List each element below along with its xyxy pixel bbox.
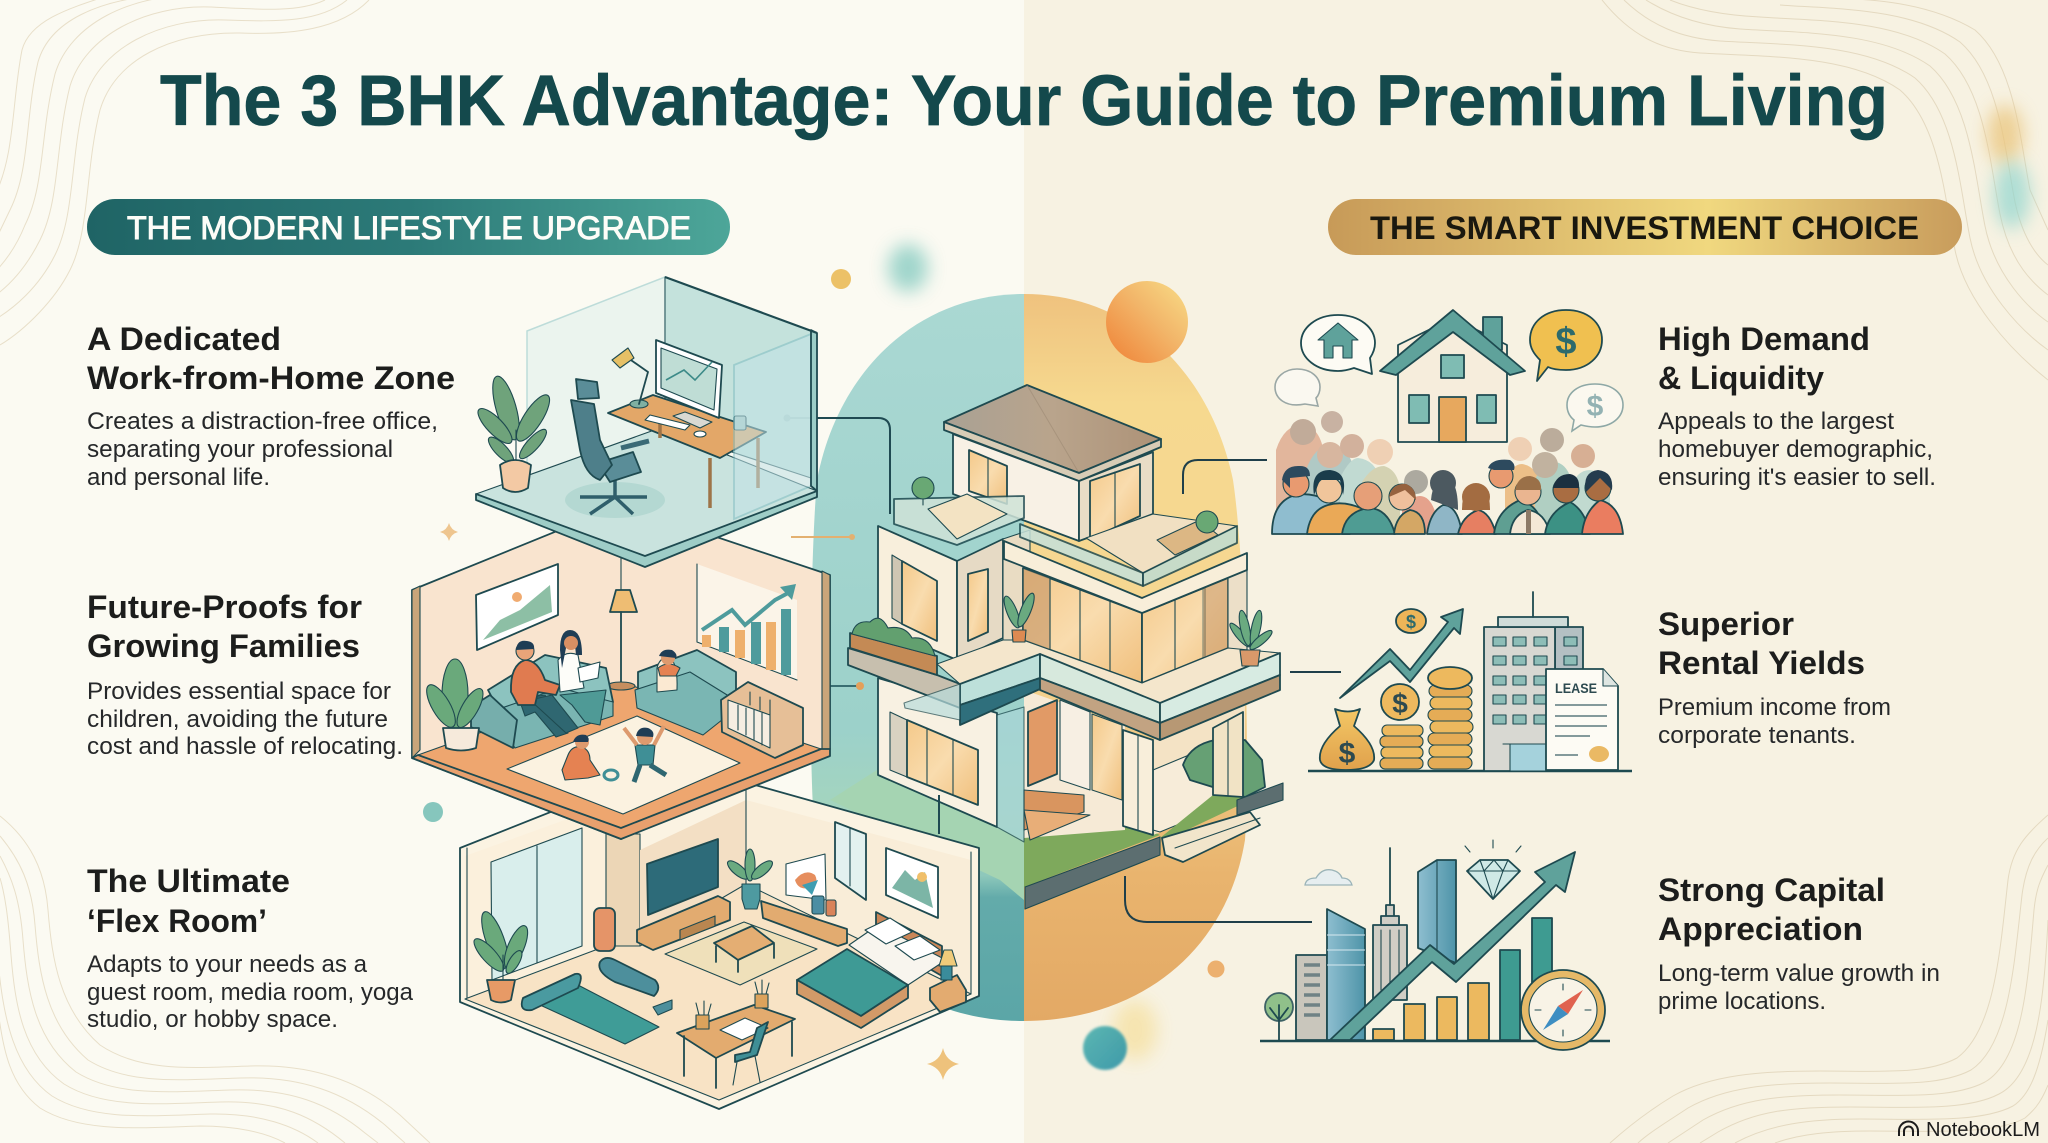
flex room: shelf, art and plant: [725, 822, 866, 946]
icon: floating coin: $: [1406, 612, 1416, 632]
office: floor slab: [476, 428, 817, 567]
left section banner: THE MODERN LIFESTYLE UPGRADE: [127, 210, 691, 246]
family room: walls and slab: [412, 505, 830, 839]
text block: demand and liquidity: Appeals to the largest: [1658, 408, 1894, 435]
icon group: rental yields: [1308, 592, 1632, 771]
house: ground floor right wing: [1024, 690, 1283, 862]
icon: gold dollar bubble: $: [1555, 321, 1577, 363]
icon: diamond: [1465, 840, 1521, 899]
house: lawn and base: [830, 768, 1160, 909]
text block: work-from-home zone: Creates a distraction-free office,: [87, 408, 438, 435]
connector lines: [784, 414, 1341, 922]
family room: second sofa with child: [635, 650, 736, 735]
office: front glass panel: [665, 277, 817, 519]
right section banner: THE SMART INVESTMENT CHOICE: [1370, 210, 1919, 246]
text block: work-from-home zone: and personal life.: [87, 464, 270, 491]
flex room: wall picture: [886, 848, 938, 918]
icon: office building: [1484, 592, 1583, 771]
icon: floating coin: [1396, 609, 1426, 633]
text block: rental yields: [1658, 606, 1891, 749]
flex room: walls and floor: [460, 783, 979, 1109]
text block: flex room: ‘Flex Room’: [87, 903, 267, 939]
text block: capital appreciation: Appreciation: [1658, 911, 1863, 947]
text block: growing families: Future-Proofs for: [87, 589, 362, 625]
icon: lease document: LEASE: [1555, 680, 1597, 696]
icon: speech bubble with house: [1301, 315, 1375, 374]
flex room: desk and chair: [677, 980, 795, 1088]
text block: growing families: Provides essential space for: [87, 678, 391, 705]
illustration: home office room: [473, 277, 817, 567]
icon: short coin stack: $: [1392, 688, 1408, 719]
text block: flex room: The Ultimate: [87, 863, 290, 899]
title: The 3 BHK Advantage: Your Guide to Premium Living: [160, 62, 1888, 141]
text block: work-from-home zone: Work-from-Home Zone: [87, 360, 455, 396]
icon group: capital appreciation: [1260, 840, 1610, 1050]
icon: empty speech bubble: [1275, 369, 1320, 406]
office: desk with monitor, lamp and mug: [608, 340, 766, 508]
text block: capital appreciation: Strong Capital: [1658, 872, 1885, 908]
text block: flex room: studio, or hobby space.: [87, 1006, 338, 1033]
text block: work-from-home zone: separating your professional: [87, 436, 393, 463]
office: task chair: [571, 379, 649, 514]
icon: house: [1380, 310, 1525, 442]
icon: compass: [1521, 970, 1605, 1050]
text block: capital appreciation: prime locations.: [1658, 988, 1826, 1015]
flex room: TV and media unit: [594, 839, 730, 951]
family room: crib: [721, 682, 803, 758]
text block: work-from-home zone: A Dedicated: [87, 321, 281, 357]
icon: lease document: [1546, 669, 1618, 770]
house: planter ledge: [848, 618, 960, 708]
orange sun disc: [1106, 281, 1188, 363]
icon: faded dollar bubble: $: [1587, 390, 1604, 423]
house: lower balcony: [904, 640, 1280, 740]
icon: city skyline: [1296, 848, 1456, 1040]
text block: demand and liquidity: ensuring it's easier to sell.: [1658, 464, 1936, 491]
icon: crowd of buyers: [1272, 411, 1623, 534]
office: potted plant: [473, 374, 555, 492]
house: balcony band: [1004, 541, 1247, 613]
text block: growing families: cost and hassle of relocating.: [87, 733, 403, 760]
flex room: sliding window: [491, 828, 582, 980]
icon: tree: [1265, 993, 1293, 1040]
text block: growing families: [87, 589, 403, 760]
house: roof terrace right: [1020, 511, 1237, 586]
flex room: rug and coffee table: [665, 922, 817, 985]
icon: gold dollar bubble: [1530, 310, 1602, 381]
icon: short coin stack: [1380, 684, 1423, 769]
text block: rental yields: Rental Yields: [1658, 645, 1865, 681]
text block: flex room: Adapts to your needs as a: [87, 951, 368, 978]
house: first floor glazing: [1023, 553, 1247, 683]
family room: main sofa: [471, 655, 613, 748]
text block: capital appreciation: Long-term value growth in: [1658, 960, 1940, 987]
decorative blobs and sparkles: [423, 105, 2030, 1080]
text block: growing families: children, avoiding the future: [87, 706, 388, 733]
crowd: faded back row: [1276, 411, 1610, 534]
flex room: yoga mat and foam roller: [522, 958, 672, 1044]
family room: growth chart on wall: [697, 564, 797, 680]
icon: money bag: [1320, 709, 1374, 770]
text block: work-from-home zone: [87, 321, 455, 491]
text block: rental yields: corporate tenants.: [1658, 722, 1856, 749]
central two-tone circle: [811, 294, 1247, 1021]
text block: rental yields: Premium income from: [1658, 694, 1891, 721]
bottom teal dot: [1083, 1026, 1127, 1070]
text block: growing families: Growing Families: [87, 628, 360, 664]
text block: flex room: [87, 863, 414, 1033]
flex room: bed and nightstand: [797, 912, 966, 1028]
family room: parents on sofa: [511, 630, 606, 737]
icon: cloud: [1305, 870, 1352, 885]
text block: rental yields: Superior: [1658, 606, 1794, 642]
right section banner: [1328, 199, 1962, 255]
family room: wall art and floor lamp: [476, 564, 637, 690]
office: back glass walls: [527, 277, 817, 480]
icon: growth arrow: [1340, 609, 1463, 698]
house: ground floor left wing: [878, 678, 1024, 842]
text block: demand and liquidity: homebuyer demographic,: [1658, 436, 1933, 463]
icon: tall coin stack: [1428, 667, 1473, 769]
illustration: modern house: [830, 385, 1283, 909]
illustration: family room: [412, 505, 830, 839]
watermark: NotebookLM: NotebookLM: [1926, 1119, 2040, 1141]
icon: rising arrow: [1330, 852, 1575, 1040]
text block: demand and liquidity: [1658, 321, 1936, 491]
house: top storey: [944, 385, 1161, 541]
text block: demand and liquidity: & Liquidity: [1658, 360, 1824, 396]
text block: capital appreciation: [1658, 872, 1940, 1015]
illustration: flex room: [460, 783, 979, 1109]
text block: demand and liquidity: High Demand: [1658, 321, 1870, 357]
crowd: front row: [1272, 460, 1623, 534]
house: small terrace with shrub: [894, 477, 1024, 545]
icon: faded dollar bubble: [1567, 384, 1623, 431]
text block: flex room: guest room, media room, yoga: [87, 979, 414, 1006]
family room: potted plant: [421, 659, 488, 750]
icon group: house and buyer crowd: [1272, 310, 1623, 534]
left section banner: [87, 199, 730, 255]
flex room: potted plant: [470, 909, 532, 1002]
family room: rug with playing children: [507, 716, 740, 814]
icon: bar chart: [1373, 918, 1552, 1040]
house: upper left block: [878, 526, 1030, 660]
house: potted plants: [1001, 591, 1274, 666]
icon: money bag: $: [1339, 737, 1356, 770]
